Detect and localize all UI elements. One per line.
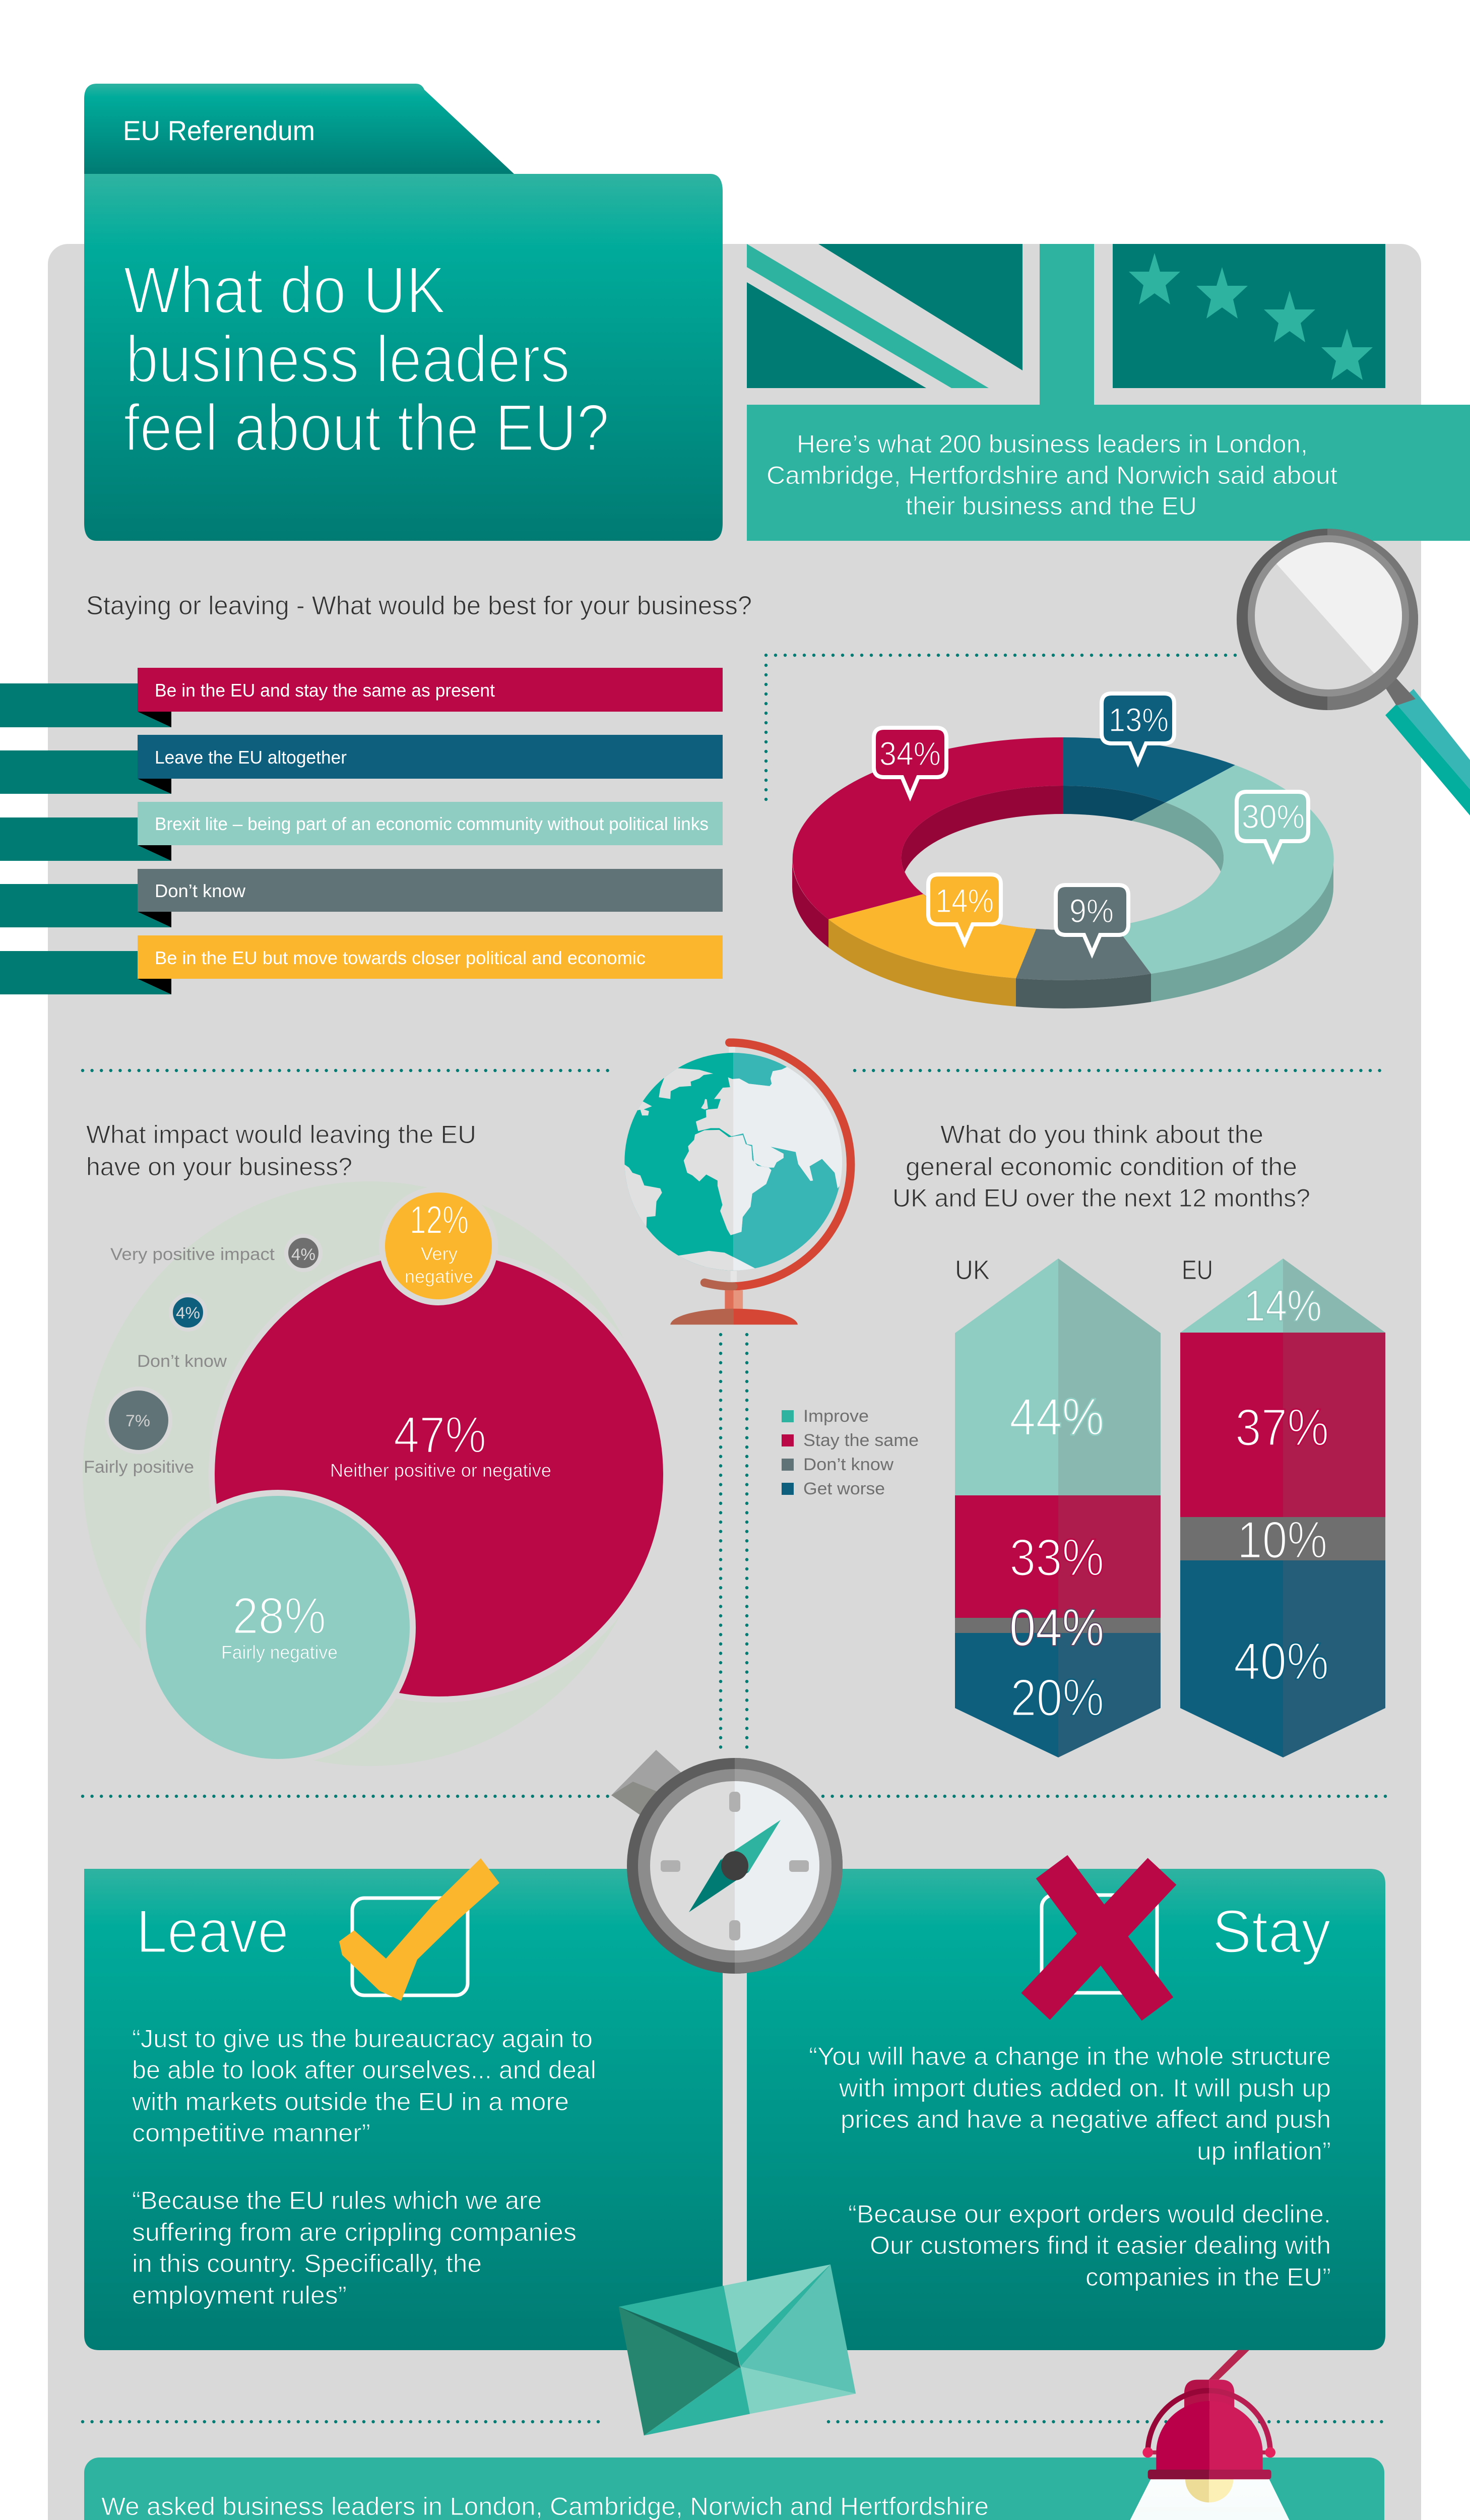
legend: economic outlook: Don’t know (803, 1455, 893, 1474)
callout: 14% (928, 874, 1001, 943)
stay quotes: prices and have a negative affect and push (841, 2105, 1331, 2133)
bubble: 28% fairly negative (143, 1493, 413, 1762)
checkbox (1042, 1895, 1157, 1993)
bubble: 7% fairly positive: Fairly positive (84, 1458, 194, 1477)
column chart: EU: 37% (1235, 1399, 1329, 1457)
flag: EU stars panel (1113, 244, 1385, 388)
callout: 13% (1102, 694, 1174, 763)
option: stay the same: Be in the EU and stay the same as present (155, 680, 495, 701)
bubble: 12% very negative: negative (405, 1266, 473, 1287)
column chart: UK: 20% (1010, 1669, 1104, 1727)
callout: 30%: 30% (1242, 798, 1305, 835)
bubble: 4% don't know: 4% (176, 1304, 200, 1322)
column chart: UK: UK (955, 1255, 990, 1285)
leave heading: Leave (136, 1897, 289, 1966)
option: brexit lite (0, 802, 723, 861)
intro panel (747, 405, 1470, 541)
leave quotes: with markets outside the EU in a more (132, 2088, 569, 2116)
bubble chart: impact (83, 1181, 666, 1766)
intro panel: Here’s what 200 business leaders in London, (797, 430, 1308, 458)
title: business leaders (125, 322, 570, 396)
heading: impact of leaving: What impact would leaving the EU (86, 1120, 476, 1149)
stay quotes: up inflation” (1197, 2137, 1331, 2165)
bubble: 28% fairly negative: Fairly negative (221, 1642, 338, 1663)
checkbox (352, 1898, 468, 1995)
light beam (1068, 2479, 1350, 2520)
callout: 9% (1056, 885, 1128, 954)
folder tab: EU Referendum: EU Referendum (123, 115, 315, 146)
bubble: 4% don't know: Don’t know (137, 1352, 227, 1371)
icon: magnifying glass (1237, 529, 1470, 815)
donut chart (792, 694, 1334, 1009)
stay quotes (809, 2042, 1331, 2291)
bubble: 7% fairly positive: 7% (125, 1412, 150, 1430)
option: leave: Leave the EU altogether (155, 747, 347, 768)
column chart: EU (1180, 1255, 1385, 1757)
title (123, 253, 609, 465)
column chart: EU: 14% (1244, 1281, 1322, 1331)
leave quotes (132, 2025, 596, 2309)
banner: survey question (84, 2458, 1384, 2520)
column chart: UK: 04% (1009, 1599, 1104, 1657)
option: stay the same (0, 668, 723, 727)
leave quotes: suffering from are crippling companies (132, 2218, 577, 2246)
callout: 34% (874, 728, 946, 796)
callout: 14%: 14% (935, 882, 994, 919)
leave quotes: “Because the EU rules which we are (132, 2186, 542, 2215)
option: brexit lite: Brexit lite – being part of an economic community without political links (155, 813, 709, 834)
folder tab: EU Referendum (84, 84, 514, 174)
bubble: 47% neither (212, 1250, 666, 1699)
legend: economic outlook: Stay the same (803, 1431, 919, 1450)
heading: staying or leaving: Staying or leaving - What would be best for your business? (86, 591, 752, 620)
heading: impact of leaving (86, 1120, 476, 1181)
leave quotes: in this country. Specifically, the (132, 2249, 482, 2278)
option: don't know (0, 869, 723, 927)
option: don't know: Don’t know (155, 880, 246, 901)
stay quotes: “You will have a change in the whole structure (809, 2042, 1331, 2070)
option: leave (0, 735, 723, 794)
leave quotes: “Just to give us the bureaucracy again to (132, 2025, 593, 2053)
heading: economic condition: UK and EU over the next 12 months? (892, 1184, 1310, 1212)
bubble: 4% very positive (110, 1236, 321, 1270)
bubble: 4% very positive: 4% (291, 1245, 315, 1264)
stay quotes: companies in the EU” (1085, 2263, 1331, 2291)
leave quotes: employment rules” (132, 2281, 347, 2309)
column chart: UK (955, 1255, 1161, 1757)
legend: economic outlook: Improve (803, 1407, 869, 1426)
intro panel: Cambridge, Hertfordshire and Norwich said about (766, 461, 1337, 489)
heading: economic condition (892, 1120, 1310, 1212)
column chart: UK: 44% (1009, 1388, 1104, 1446)
option: closer union (0, 935, 723, 994)
icon: cross (1036, 1867, 1162, 2009)
bubble: 28% fairly negative: 28% (232, 1587, 326, 1645)
legend: economic outlook: Get worse (803, 1479, 885, 1498)
bubble: 12% very negative: 12% (410, 1198, 469, 1242)
legend: economic outlook (782, 1407, 919, 1498)
heading: economic condition: What do you think about the (940, 1120, 1263, 1149)
callout: 30% (1237, 792, 1308, 860)
column chart: EU: EU (1182, 1255, 1213, 1285)
option: closer union: Be in the EU but move towards closer political and economic (155, 948, 646, 968)
banner: survey question: We asked business leaders in London, Cambridge, Norwich and Hertfordshire (101, 2492, 989, 2520)
bubble: 4% very positive: Very positive impact (110, 1245, 275, 1264)
bubble: 47% neither: 47% (394, 1406, 486, 1464)
panel: stay (747, 1867, 1385, 2350)
icon: lamp (1142, 2350, 1275, 2502)
stay heading: Stay (1212, 1897, 1331, 1966)
callout: 9%: 9% (1069, 892, 1114, 929)
column chart: UK: 33% (1009, 1529, 1104, 1587)
stay quotes: with import duties added on. It will push up (839, 2074, 1331, 2102)
leave quotes: competitive manner” (132, 2119, 370, 2147)
column chart: EU: 10% (1237, 1511, 1327, 1569)
callout: 13%: 13% (1109, 701, 1169, 738)
panel: leave (84, 1858, 723, 2350)
heading: impact of leaving: have on your business? (86, 1153, 352, 1181)
icon: envelope (619, 2264, 856, 2435)
bubble: 7% fairly positive (84, 1389, 194, 1477)
title: feel about the EU? (123, 391, 609, 465)
bubble: 4% don't know (137, 1295, 227, 1371)
intro panel: their business and the EU (906, 492, 1197, 520)
flag: union jack corner (747, 244, 1094, 406)
icon: globe (622, 1043, 851, 1325)
stay quotes: Our customers find it easier dealing with (870, 2231, 1331, 2259)
leave quotes: be able to look after ourselves... and deal (132, 2056, 596, 2084)
stay quotes: “Because our export orders would decline. (848, 2200, 1331, 2228)
callout: 34%: 34% (879, 735, 941, 772)
column chart: EU: 40% (1234, 1632, 1329, 1691)
title panel (84, 174, 723, 541)
bubble: 12% very negative: Very (421, 1243, 458, 1264)
title: What do UK (123, 253, 446, 327)
list of options (0, 668, 723, 994)
icon: tick (339, 1858, 499, 2001)
heading: economic condition: general economic condition of the (906, 1153, 1297, 1181)
icon: compass (611, 1750, 843, 1974)
bubble: 12% very negative (382, 1189, 495, 1302)
bubble: 47% neither: Neither positive or negative (330, 1460, 551, 1481)
